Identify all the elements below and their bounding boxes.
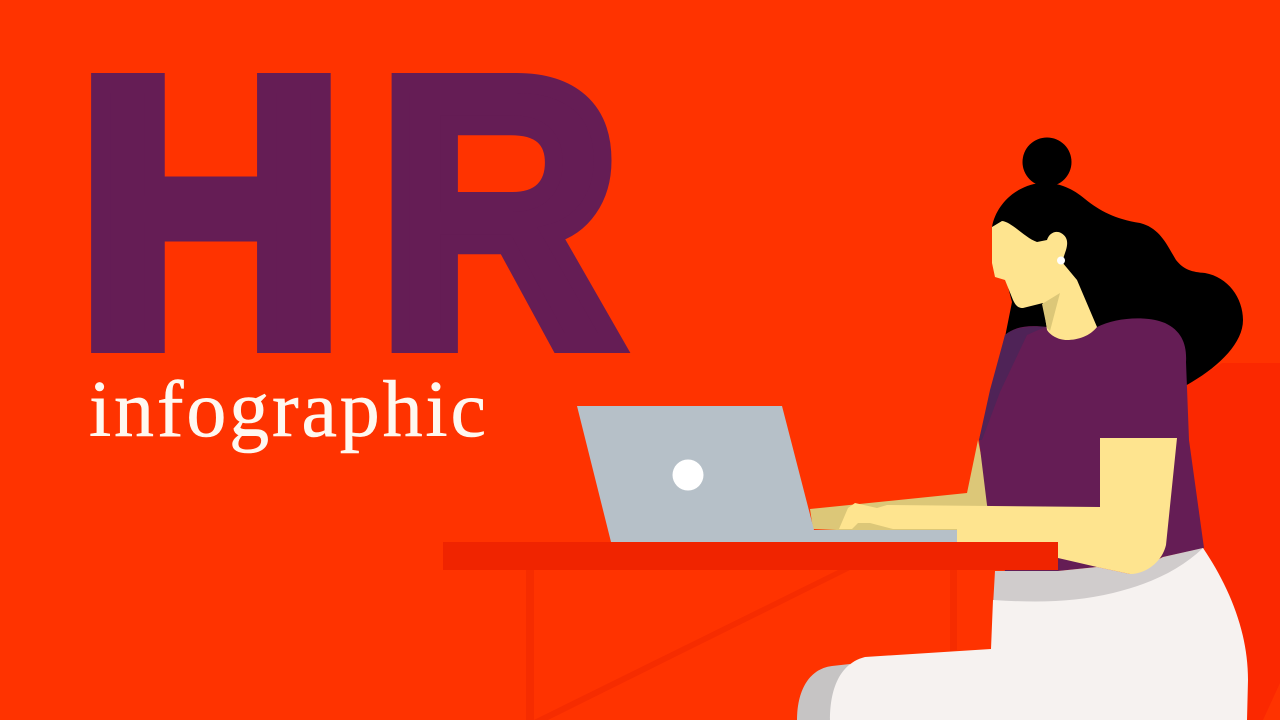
- title: HR: [76, 2, 621, 424]
- earring: [1057, 256, 1065, 264]
- laptop body: [577, 406, 957, 542]
- laptop: [577, 406, 957, 542]
- neck shadow: [1042, 293, 1060, 331]
- desk: [443, 542, 1058, 720]
- long hair: [992, 183, 1243, 400]
- desk top: [443, 542, 1058, 570]
- far leg shadow: [797, 664, 860, 720]
- laptop logo: [672, 460, 704, 490]
- skirt: [830, 548, 1248, 720]
- woman figure: [797, 138, 1248, 720]
- title: HR: H: [76, 2, 346, 424]
- desk legs and brace: [526, 570, 957, 720]
- title: HR: R: [378, 2, 621, 424]
- chair back: [1150, 363, 1280, 720]
- subtitle: infographic: infographic: [89, 366, 486, 454]
- shirt sleeve shade: [979, 327, 1045, 440]
- far arm: [810, 440, 1000, 542]
- shirt: [979, 318, 1204, 572]
- hair bun: [1022, 138, 1072, 186]
- face and neck: [992, 221, 1097, 340]
- skirt shadow: [993, 548, 1215, 606]
- near arm: [839, 438, 1177, 574]
